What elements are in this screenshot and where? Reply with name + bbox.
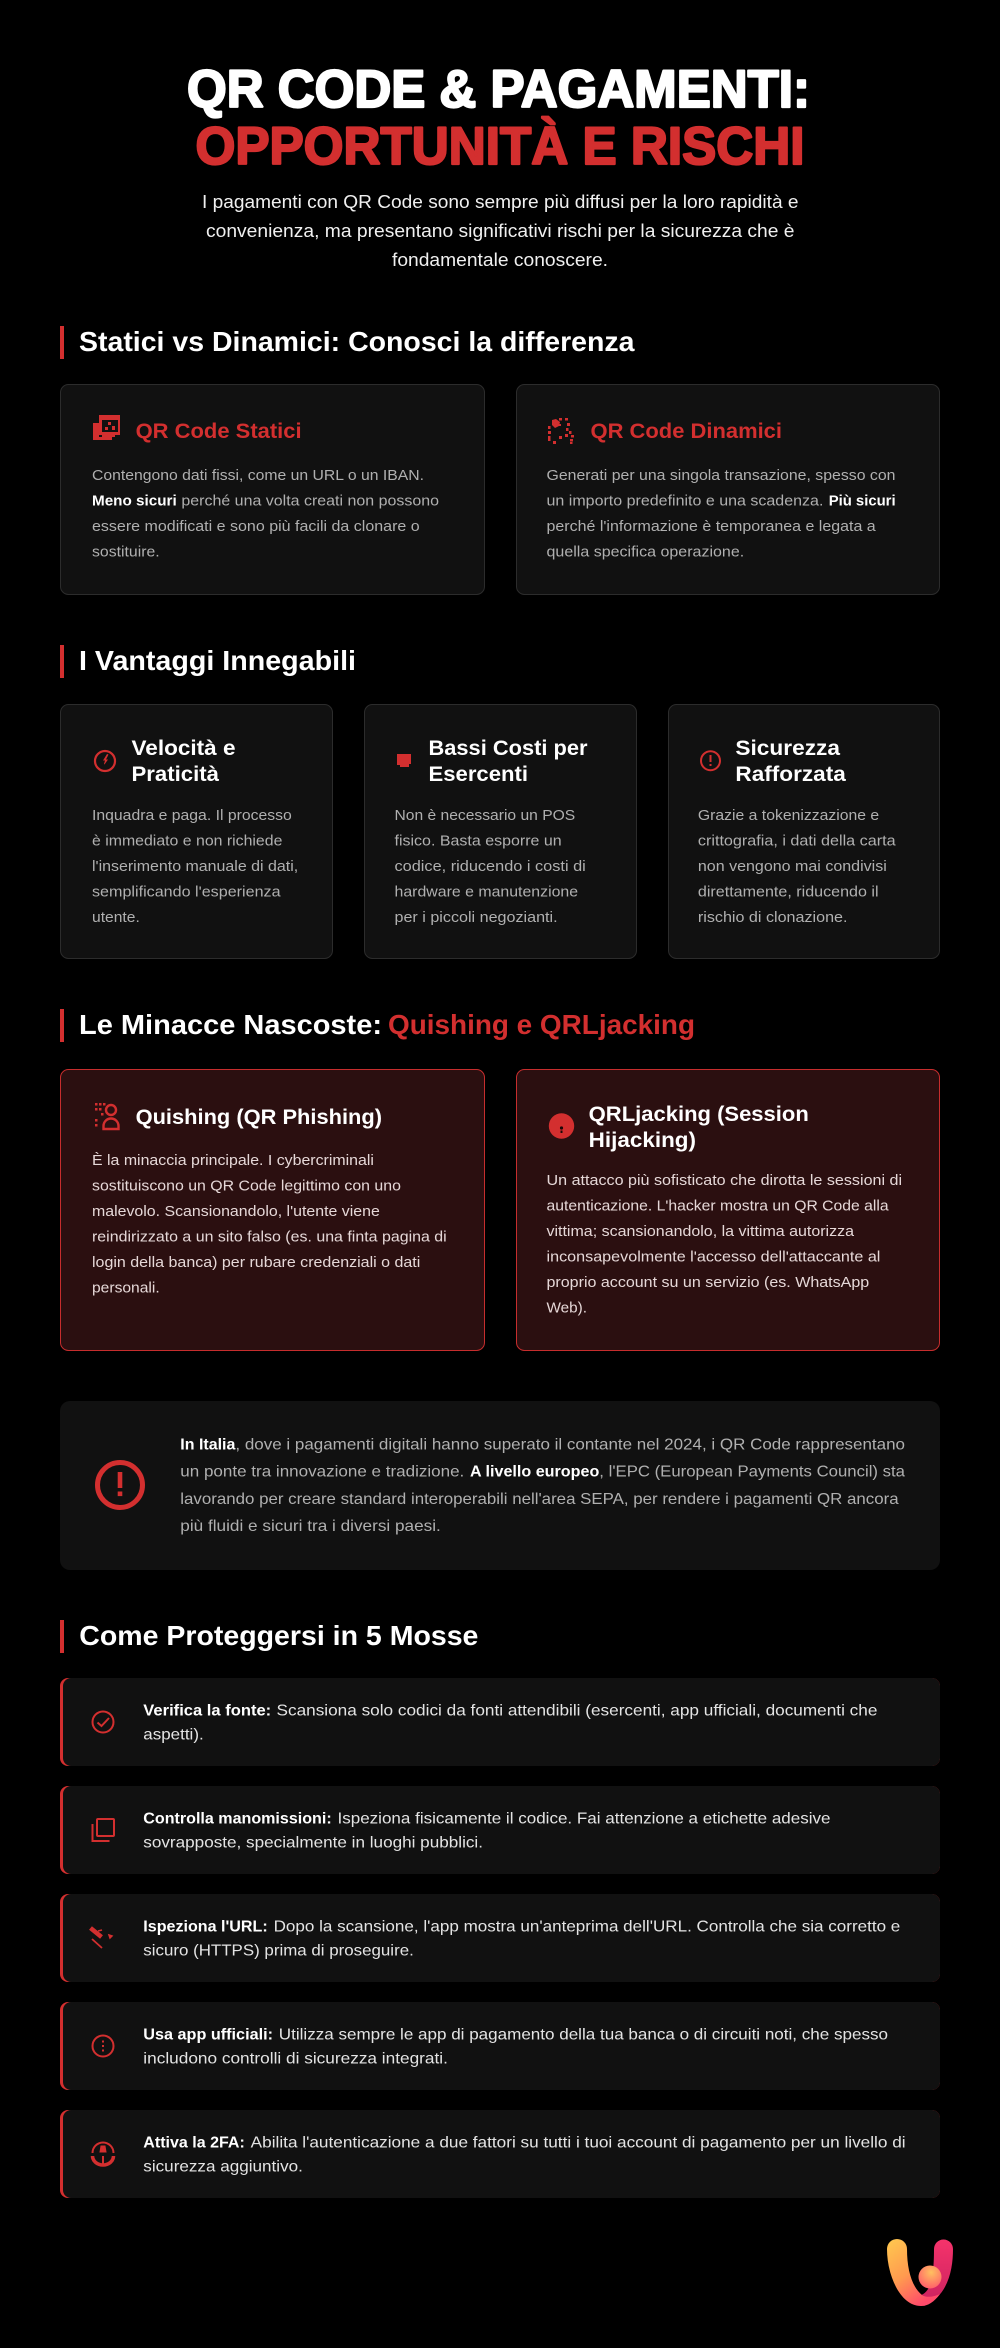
- tip text: Usa app ufficiali:: [143, 2027, 273, 2044]
- card text: Un attacco più sofisticato che dirotta le sessioni di: [546, 1172, 902, 1189]
- panel: bassi costi: [364, 704, 636, 958]
- tip text: Scansiona solo codici da fonti attendibili (esercenti, app ufficiali, documenti che: [276, 1703, 878, 1720]
- card text: Contengono dati fissi, come un URL o un IBAN.: [92, 467, 424, 484]
- card title: [132, 737, 236, 786]
- card title: QRLjacking (Session: [589, 1103, 809, 1126]
- card text: codice, riducendo i costi di: [394, 858, 586, 875]
- heading: minacce: Le Minacce Nascoste:: [79, 1009, 382, 1040]
- card text: È la minaccia principale. I cybercriminali: [92, 1152, 374, 1169]
- card text: personali.: [92, 1280, 160, 1296]
- callout: Italia e Europa: [60, 1401, 940, 1570]
- card text: direttamente, riducendo il: [698, 884, 879, 900]
- panel: QR code statici: [60, 384, 484, 594]
- tip text: sicuro (HTTPS) prima di proseguire.: [143, 1943, 414, 1960]
- icon: tag: [397, 754, 411, 767]
- card title: Praticità: [132, 763, 219, 786]
- card text: Grazie a tokenizzazione e: [698, 807, 879, 824]
- tip text: Utilizza sempre le app di pagamento della tua banca o di circuiti noti, che spesso: [279, 2027, 888, 2044]
- callout text: lavorando per creare standard interoperabili nell'area SEPA, per rendere i pagamenti QR ancora: [180, 1491, 899, 1508]
- card title: Sicurezza: [735, 737, 840, 760]
- tip text: [143, 2135, 906, 2176]
- heading: minacce: Quishing e QRLjacking: [388, 1009, 695, 1040]
- card text: [92, 467, 439, 560]
- title: QR CODE & PAGAMENTI:: [187, 60, 810, 119]
- card text: [546, 467, 896, 560]
- title: [187, 60, 810, 176]
- tip text: [143, 1703, 878, 1744]
- card text: [698, 807, 896, 926]
- card text: crittografia, i dati della carta: [698, 832, 896, 850]
- card title: [735, 737, 846, 786]
- card title: Hijacking): [589, 1129, 696, 1152]
- icon: quishing: [95, 1103, 118, 1129]
- tip text: Ispeziona fisicamente il codice. Fai attenzione a etichette adesive: [338, 1811, 831, 1828]
- panel: sicurezza: [668, 704, 940, 958]
- callout text: [180, 1436, 905, 1535]
- tip: verifica la fonte: [60, 1678, 940, 1766]
- card title: Esercenti: [428, 763, 528, 786]
- card title: Bassi Costi per: [428, 737, 588, 760]
- card title: QR Code Statici: [136, 420, 302, 443]
- tip text: Ispeziona l'URL:: [143, 1919, 268, 1936]
- card text: semplificando l'esperienza: [92, 884, 281, 900]
- card text: utente.: [92, 909, 140, 926]
- icon: dynamic QR: [548, 418, 574, 444]
- card title: [589, 1103, 809, 1152]
- tip: ispeziona URL: [60, 1894, 940, 1982]
- icon: copy squares: [92, 1819, 114, 1841]
- tip text: [143, 1811, 831, 1852]
- icon: alert: [98, 1462, 142, 1508]
- panel: QR code dinamici: [516, 384, 940, 594]
- icon: speed gauge: [95, 751, 115, 771]
- card text: rischio di clonazione.: [698, 909, 848, 926]
- card text: è immediato e non richiede: [92, 832, 282, 850]
- tip: controlla manomissioni: [60, 1786, 940, 1874]
- panel: quishing: [60, 1070, 484, 1350]
- card text: Inquadra e paga. Il processo: [92, 807, 292, 824]
- card text: essere modificati e sono più facili da clonare o: [92, 518, 420, 535]
- icon: static QR: [93, 415, 120, 440]
- icon: check circle: [92, 1712, 114, 1732]
- card text: proprio account su un servizio (es. WhatsApp: [546, 1274, 869, 1291]
- card text: [546, 1172, 902, 1316]
- card text: [92, 1152, 447, 1296]
- card text: quella specifica operazione.: [546, 544, 744, 560]
- heading: statici vs dinamici: Statici vs Dinamici: Conosci la differenza: [79, 326, 635, 357]
- card title: QR Code Dinamici: [590, 420, 782, 443]
- icon: broken link: [90, 1928, 112, 1948]
- tip text: [143, 1919, 900, 1960]
- icon: alert circle: [701, 751, 720, 770]
- tip text: sovrapposte, specialmente in luoghi pubblici.: [143, 1835, 483, 1852]
- heading: vantaggi: I Vantaggi Innegabili: [79, 645, 356, 676]
- card text: autenticazione. L'hacker mostra un QR Code alla: [546, 1198, 889, 1214]
- tip text: Controlla manomissioni:: [143, 1811, 332, 1828]
- card title: Quishing (QR Phishing): [136, 1106, 382, 1129]
- card text: [92, 807, 298, 926]
- icon: dots circle: [92, 2036, 114, 2056]
- intro text: convenienza, ma presentano significativi rischi per la sicurezza che è: [206, 221, 794, 241]
- intro text: fondamentale conoscere.: [392, 250, 608, 270]
- card text: fisico. Basta esporre un: [394, 832, 562, 850]
- panel: qrljacking: [516, 1070, 940, 1350]
- card text: vittima; scansionandolo, la vittima autorizza: [546, 1223, 855, 1240]
- card text: login della banca) per rubare credenziali o dati: [92, 1254, 420, 1271]
- card text: perché l'informazione è temporanea e legata a: [546, 518, 876, 535]
- card text: reindirizzato a un sito falso (es. una finta pagina di: [92, 1228, 447, 1246]
- tip: usa app ufficiali: [60, 2002, 940, 2090]
- heading: minacce: [60, 1009, 695, 1042]
- tip text: Verifica la fonte:: [143, 1703, 271, 1720]
- callout text: più fluidi e sicuri tra i diversi paesi.: [180, 1518, 441, 1535]
- card text: sostituiscono un QR Code legittimo con uno: [92, 1178, 401, 1194]
- card text: sostituire.: [92, 544, 160, 560]
- card text: Web).: [546, 1300, 587, 1316]
- callout text: , l'EPC (European Payments Council) sta: [599, 1464, 905, 1481]
- callout text: un ponte tra innovazione e tradizione.: [180, 1464, 464, 1481]
- card text: perché una volta creati non possono: [181, 492, 439, 510]
- tip text: Attiva la 2FA:: [143, 2135, 245, 2152]
- tip text: aspetti).: [143, 1727, 204, 1744]
- logo: [887, 2239, 953, 2306]
- card text: Meno sicuri: [92, 492, 177, 510]
- tip: attiva la 2FA: [60, 2110, 940, 2198]
- card text: l'inserimento manuale di dati,: [92, 858, 298, 875]
- icon: qrljacking: [549, 1113, 574, 1139]
- callout text: In Italia: [180, 1436, 236, 1453]
- tip text: [143, 2027, 888, 2068]
- card text: inconsapevolmente l'accesso dell'attaccante al: [546, 1248, 880, 1266]
- title: OPPORTUNITÀ E RISCHI: [196, 116, 804, 176]
- card text: per i piccoli negozianti.: [394, 909, 558, 926]
- card text: Più sicuri: [829, 492, 896, 510]
- card title: Rafforzata: [735, 763, 846, 786]
- tip text: includono controlli di sicurezza integrati.: [143, 2051, 448, 2068]
- card text: non vengono mai condivisi: [698, 858, 887, 875]
- card text: [394, 807, 586, 926]
- card text: Generati per una singola transazione, spesso con: [546, 467, 896, 484]
- card title: Velocità e: [132, 737, 236, 760]
- callout text: A livello europeo: [470, 1464, 600, 1481]
- card title: [428, 737, 588, 786]
- card text: Non è necessario un POS: [394, 807, 575, 824]
- tip text: sicurezza aggiuntivo.: [143, 2159, 303, 2176]
- heading: come proteggersi: Come Proteggersi in 5 Mosse: [79, 1620, 478, 1651]
- tip text: Abilita l'autenticazione a due fattori su tutti i tuoi account di pagamento per un livello di: [251, 2135, 906, 2152]
- intro text: I pagamenti con QR Code sono sempre più diffusi per la loro rapidità e: [202, 192, 798, 212]
- card text: malevolo. Scansionandolo, l'utente viene: [92, 1203, 380, 1220]
- intro text: [202, 192, 798, 270]
- panel: velocità: [60, 704, 332, 958]
- card text: hardware e manutenzione: [394, 884, 578, 900]
- card text: un importo predefinito e una scadenza.: [546, 492, 823, 510]
- icon: shield lock: [92, 2142, 114, 2165]
- callout text: , dove i pagamenti digitali hanno superato il contante nel 2024, i QR Code rappresentano: [235, 1436, 905, 1453]
- tip text: Dopo la scansione, l'app mostra un'anteprima dell'URL. Controlla che sia corretto e: [274, 1919, 900, 1936]
